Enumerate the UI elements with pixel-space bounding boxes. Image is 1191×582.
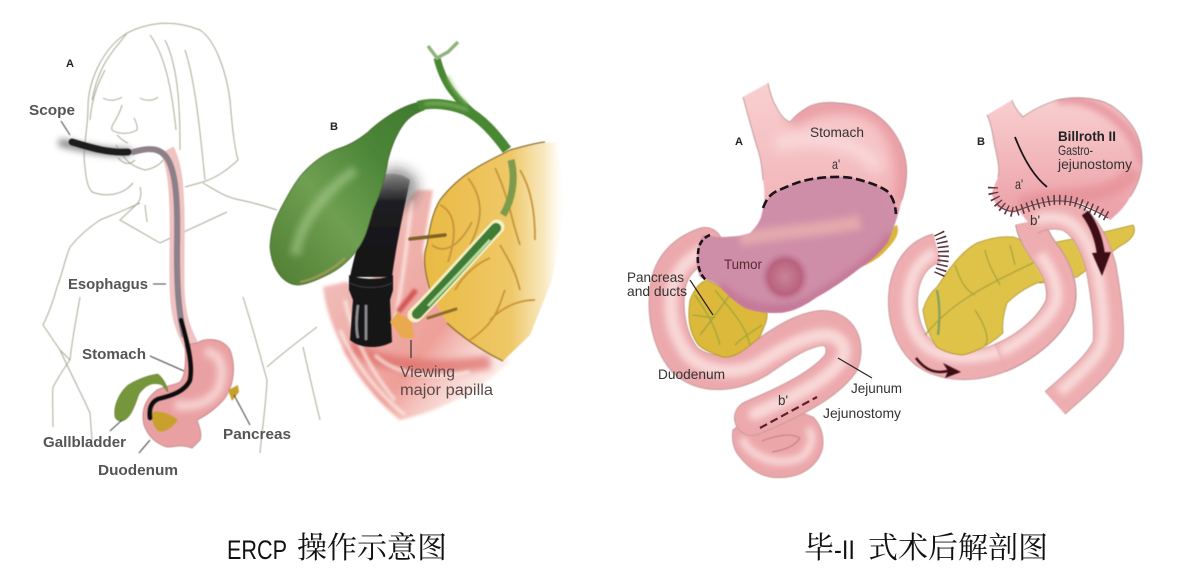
labels: Pancreas [223, 426, 291, 443]
labels [977, 128, 1132, 228]
pancreas with duct [415, 142, 566, 361]
pancreas head and body [923, 237, 1052, 355]
caption: Billroth II anatomy: -II [834, 535, 855, 565]
labels [627, 124, 902, 421]
labels: and ducts [627, 283, 687, 299]
lower jejunal loop [732, 400, 823, 478]
label: viewing major papilla: major papilla [400, 382, 493, 399]
caption: ERCP: 操作示意图 [297, 532, 447, 565]
labels: A [66, 58, 74, 70]
black endoscope [349, 168, 418, 347]
labels: Jejunum [851, 380, 902, 396]
arrows [916, 213, 1111, 378]
labels: Pancreas [627, 269, 684, 285]
labels: b' [1030, 212, 1040, 228]
labels [29, 58, 291, 479]
gastric remnant [987, 98, 1142, 220]
labels: Tumor [724, 256, 762, 272]
scope tube [62, 142, 191, 418]
labels: A [735, 136, 743, 148]
labels: Duodenum [658, 366, 725, 382]
pancreatic ducts [410, 235, 456, 318]
gallbladder small [115, 374, 168, 421]
label: viewing major papilla [330, 121, 493, 399]
duodenum and jejunum tube [667, 245, 844, 418]
panel: Billroth II illustration A, before surgery [627, 83, 910, 478]
labels: a' [832, 156, 840, 172]
panel: ERCP illustration B, close-up of papilla [270, 42, 566, 420]
afferent limb tube [903, 222, 1061, 365]
labels: Stomach [82, 346, 146, 363]
labels: Gallbladder [43, 434, 126, 451]
pancreas [689, 225, 898, 357]
labels: a' [1015, 176, 1023, 192]
labels: Duodenum [98, 462, 178, 479]
labels: b' [778, 392, 788, 408]
caption: ERCP [227, 532, 447, 565]
surgical dashed lines [698, 177, 896, 428]
leader lines [690, 280, 872, 378]
labels: Jejunostomy [823, 405, 901, 421]
caption: Billroth II anatomy: 式术后解剖图 [868, 532, 1048, 565]
labels: B [977, 136, 985, 148]
label: viewing major papilla: B [330, 121, 338, 133]
tumor [761, 252, 809, 302]
pancreas tail behind tubes [1040, 225, 1134, 283]
pancreas small [152, 385, 239, 431]
papilla [390, 312, 414, 338]
front segment of afferent limb [1000, 222, 1061, 358]
labels: Stomach [810, 124, 864, 140]
stomach with tumor [690, 83, 910, 330]
labels: Esophagus [68, 276, 148, 293]
staple lines [939, 187, 1110, 275]
large gallbladder [270, 42, 507, 285]
mucosa tissue [323, 190, 510, 420]
caption: Billroth II anatomy: 毕 [804, 532, 834, 565]
body sketch outline [43, 23, 320, 453]
labels: Gastro- [1058, 142, 1093, 158]
panel: ERCP illustration A, woman with scope [29, 23, 320, 479]
esophagus and stomach [143, 150, 233, 448]
labels: Scope [29, 102, 75, 119]
panel: Billroth II illustration B, after surgery [903, 98, 1142, 403]
caption: ERCP: ERCP [227, 535, 287, 565]
labels: Billroth II [1058, 128, 1116, 144]
efferent limb tube [1028, 214, 1109, 403]
labels: jejunostomy [1057, 156, 1132, 172]
black cut line [1015, 137, 1047, 187]
leader lines [61, 121, 250, 453]
label: viewing major papilla: Viewing [400, 364, 455, 381]
